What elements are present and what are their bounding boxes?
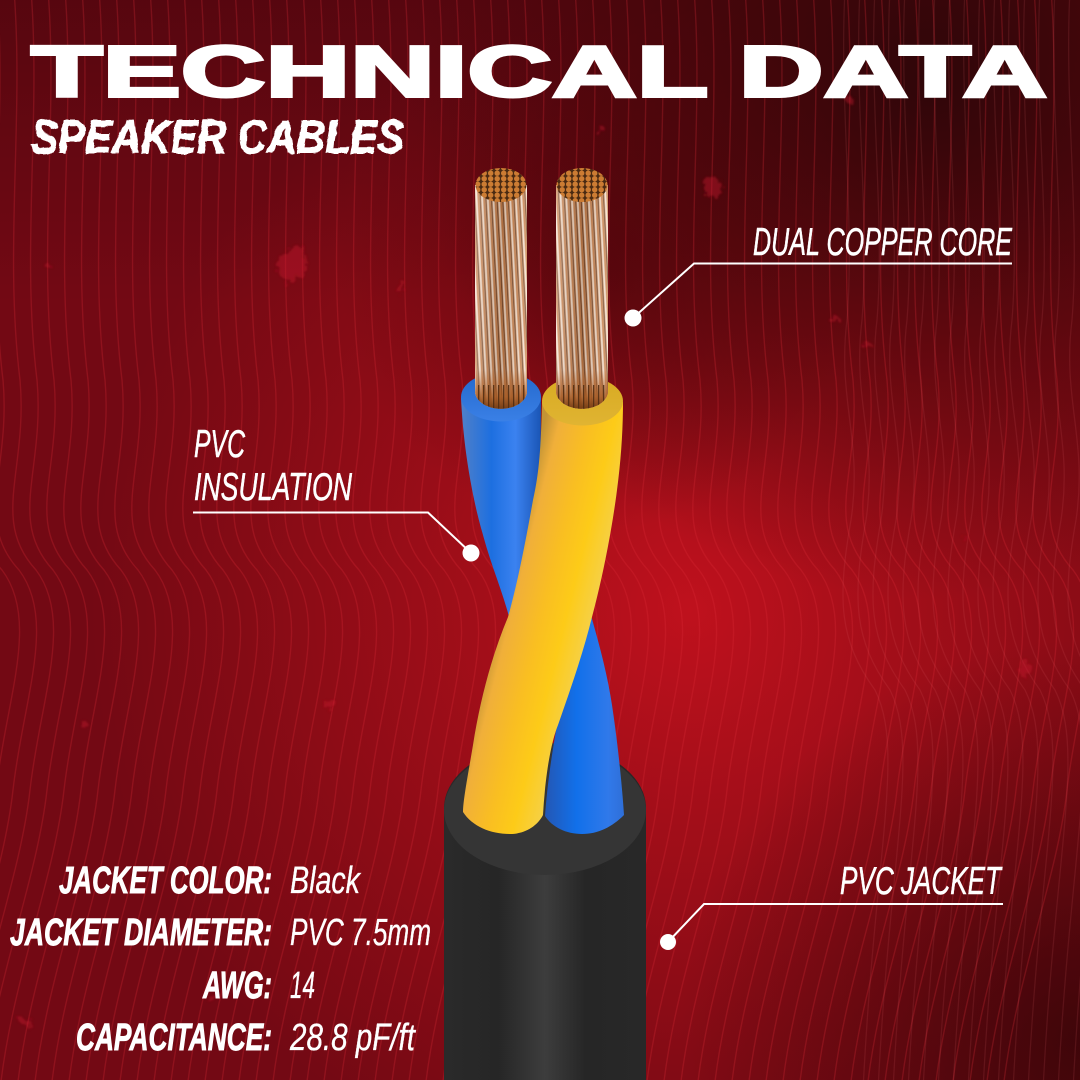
spec: jacket diameter: PVC 7.5mm	[290, 912, 431, 954]
callout: PVC insulation: INSULATION	[194, 466, 353, 509]
yellow insulation end	[542, 376, 623, 426]
callout: PVC jacket: PVC JACKET	[840, 860, 1003, 903]
spec: capacitance: CAPACITANCE:	[76, 1017, 272, 1059]
jacket	[444, 743, 646, 1080]
spec: jacket color: Black	[290, 860, 362, 902]
spec: capacitance: 28.8 pF/ft	[289, 1017, 416, 1059]
callout: PVC insulation	[193, 423, 480, 562]
blue conductor lower	[545, 612, 624, 834]
blue conductor upper	[461, 398, 541, 620]
yellow conductor	[463, 402, 623, 834]
cable illustration	[444, 168, 646, 1080]
spec: AWG: AWG:	[202, 965, 272, 1007]
copper core right	[556, 168, 608, 409]
subtitle: SPEAKER CABLES	[31, 110, 404, 163]
blue insulation end	[461, 372, 541, 422]
callout: PVC insulation: PVC	[194, 423, 246, 466]
title: TECHNICAL DATA	[31, 32, 1047, 112]
spec: AWG: 14	[290, 965, 315, 1007]
specifications list	[10, 860, 431, 1059]
spec: jacket diameter: JACKET DIAMETER:	[10, 912, 272, 954]
copper core left	[475, 168, 527, 409]
callout: PVC jacket	[660, 860, 1003, 950]
spec: jacket color: JACKET COLOR:	[59, 860, 272, 902]
callout: dual copper core	[624, 221, 1013, 326]
